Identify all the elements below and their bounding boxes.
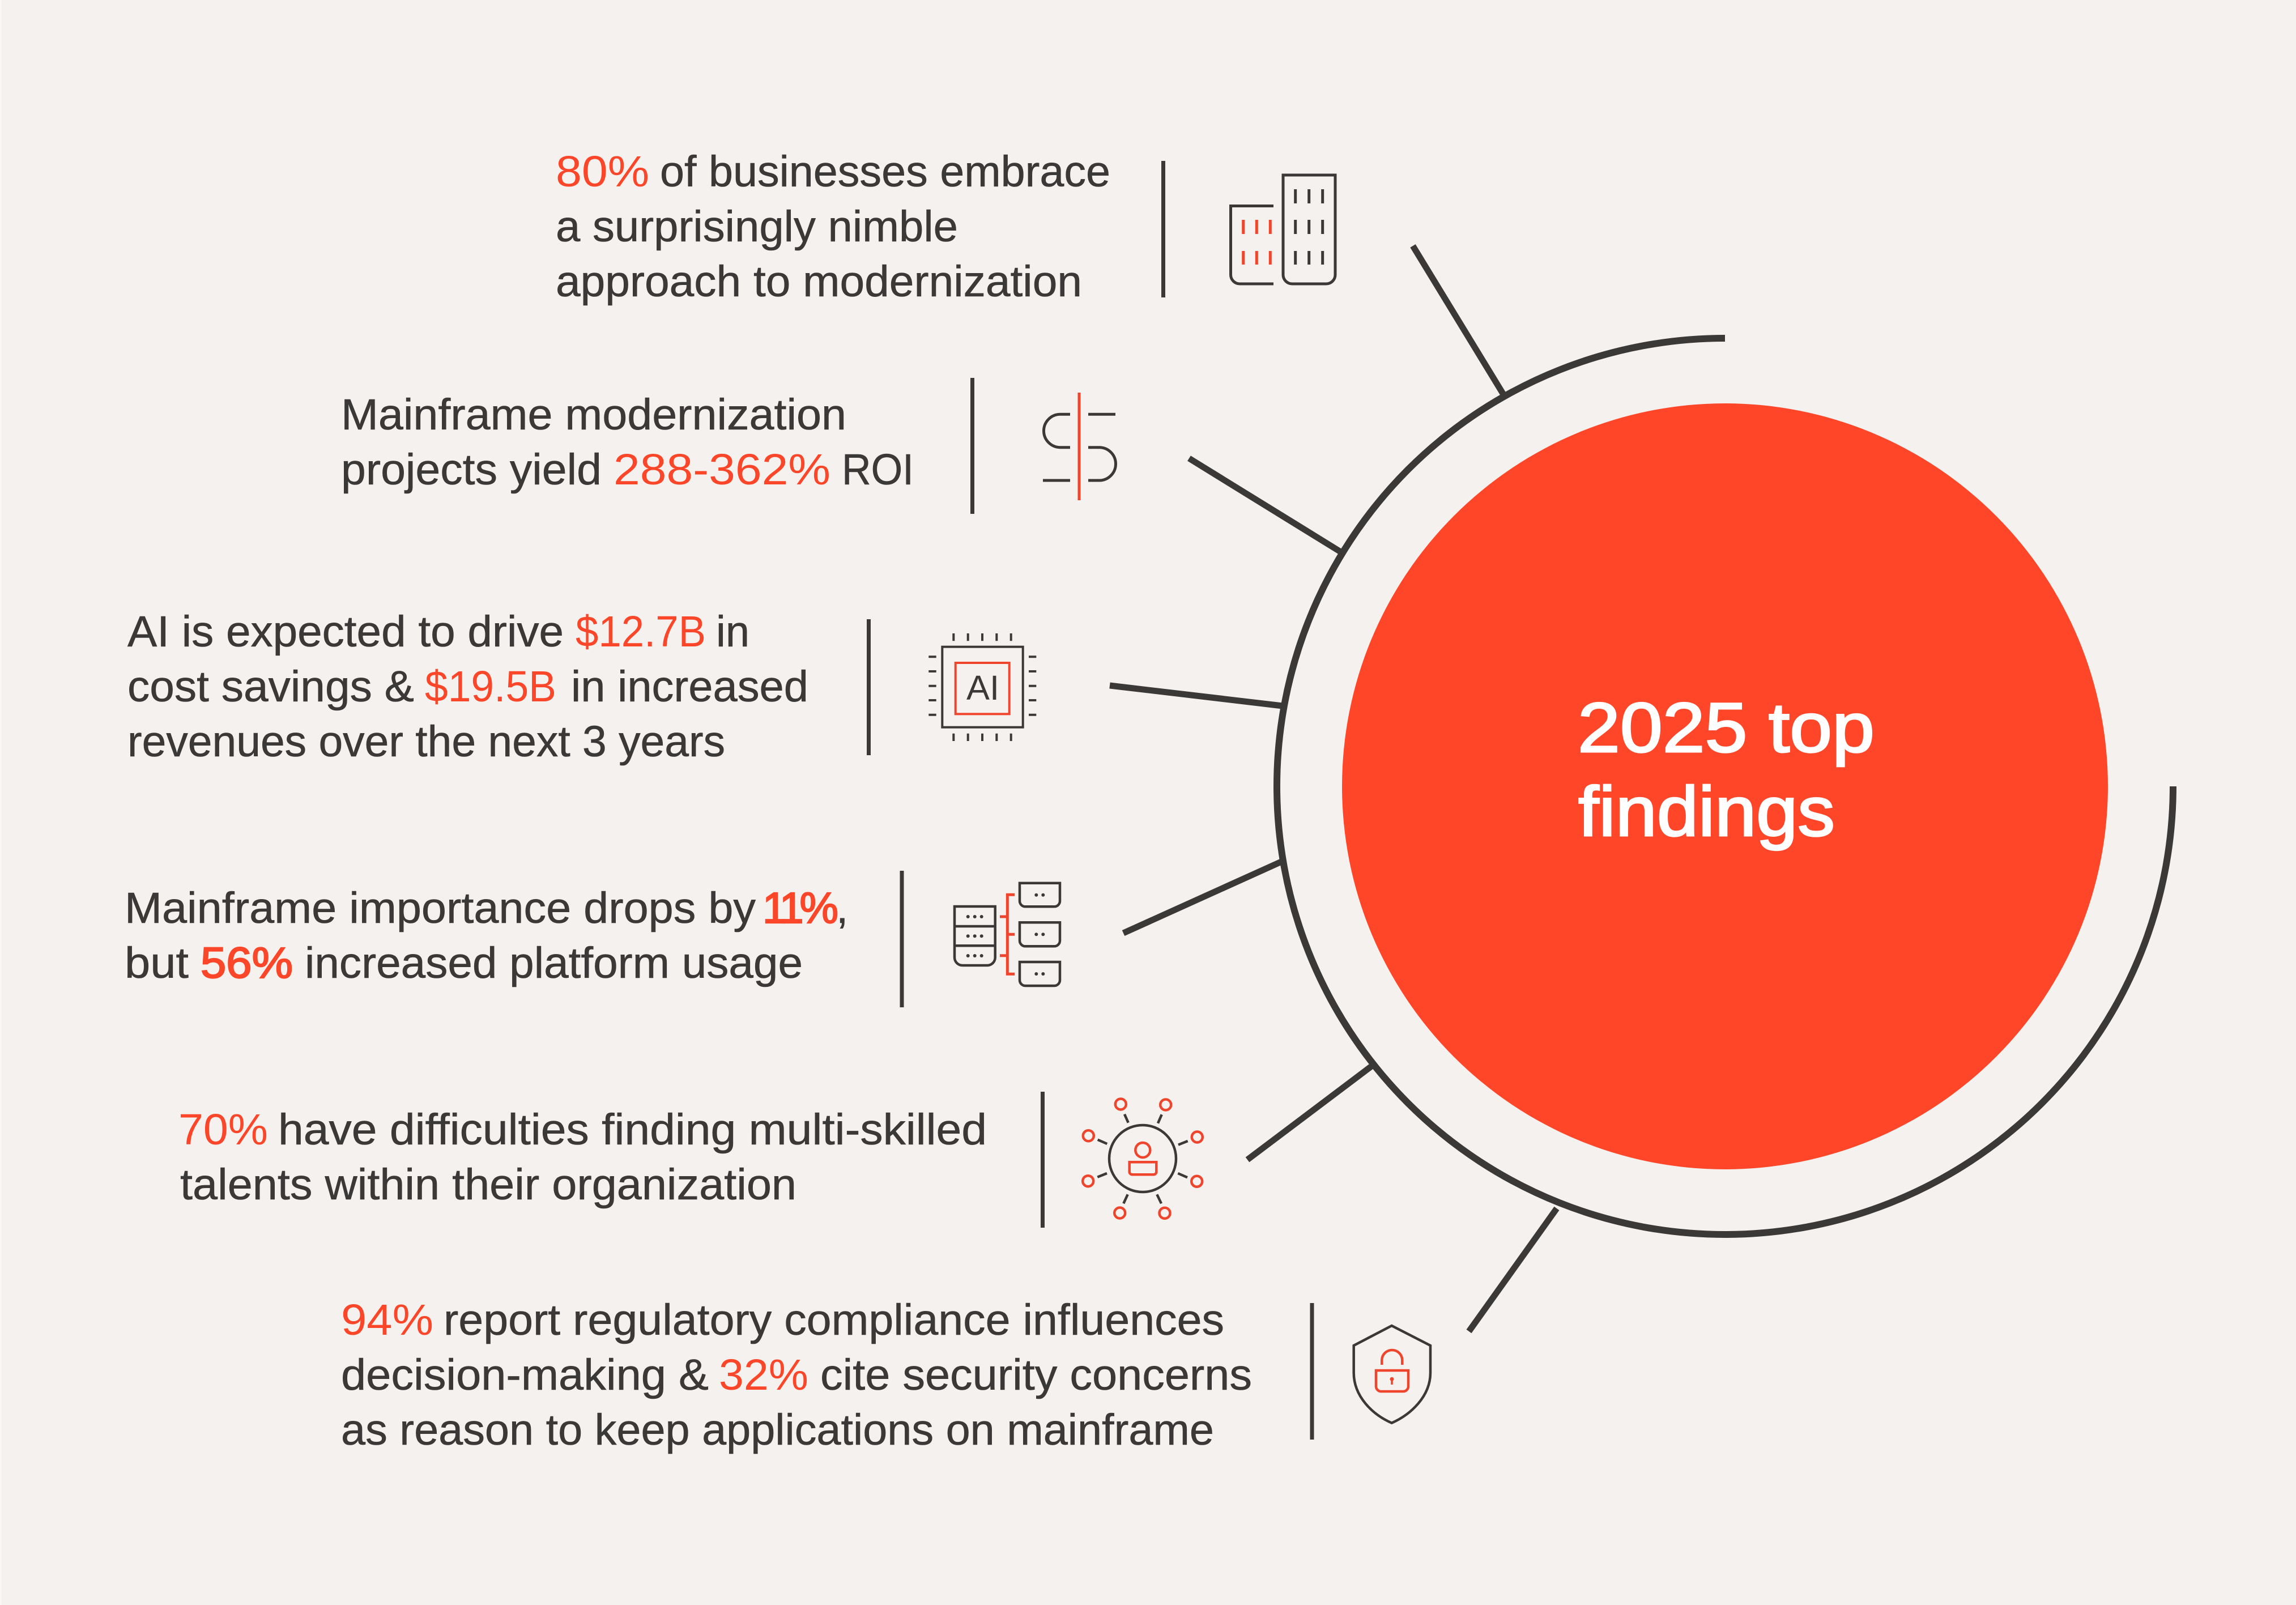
finding 3 text: revenues over the next 3 years [127, 717, 725, 766]
icon: talent network [1083, 1099, 1203, 1219]
connector line 5 [1247, 1065, 1374, 1160]
finding 4 text [125, 884, 848, 987]
finding 2 text: 288-362% [614, 445, 830, 494]
finding 6 divider [1310, 1303, 1314, 1440]
central red circle [1342, 403, 2108, 1169]
icon: AI chip [928, 633, 1036, 741]
finding 6 text [341, 1296, 1252, 1454]
finding 3 text: in [716, 607, 749, 656]
connector line 4 [1123, 861, 1283, 933]
finding 6 text: 94% [341, 1296, 433, 1344]
icon: security shield with lock [1354, 1326, 1430, 1423]
icon: AI chip: AI [966, 669, 999, 707]
finding 6 text: decision-making & [341, 1351, 709, 1399]
finding 1 divider [1161, 161, 1165, 297]
finding 6 text: 32% [719, 1351, 808, 1399]
title: 2025 top [1578, 689, 1875, 767]
finding 4 text: 56% [201, 939, 293, 987]
finding 3 text [127, 607, 808, 766]
finding 5 text [178, 1105, 987, 1209]
finding 5 text: talents within their organization [180, 1160, 796, 1209]
finding 3 divider [867, 619, 871, 755]
finding 4 divider [900, 871, 904, 1007]
finding 1 text: a surprisingly nimble [556, 202, 958, 251]
outer ring arc [1277, 338, 2173, 1234]
finding 4 text: but [125, 939, 189, 987]
finding 1 text: approach to modernization [556, 257, 1082, 306]
finding 4 text: 11% [763, 884, 838, 933]
finding 2 divider [970, 378, 974, 514]
finding 5 divider [1041, 1092, 1045, 1228]
icon: dollar sign [1043, 393, 1115, 500]
connector line 6 [1469, 1208, 1557, 1331]
finding 3 text: cost savings & [127, 662, 414, 711]
finding 5 text: 70% [178, 1105, 268, 1154]
finding 4 text: , [836, 884, 848, 933]
finding 6 text: report regulatory compliance influences [444, 1296, 1224, 1344]
finding 1 text: of businesses embrace [660, 147, 1110, 196]
finding 1 text: 80% [556, 147, 649, 196]
title: findings [1578, 773, 1835, 851]
icon: server to containers [955, 883, 1060, 986]
finding 6 text: cite security concerns [820, 1351, 1252, 1399]
finding 2 text [341, 390, 914, 494]
finding 4 text: Mainframe importance drops by [125, 884, 756, 933]
finding 4 text: increased platform usage [305, 939, 803, 987]
finding 2 text: projects yield [341, 445, 602, 494]
finding 2 text: Mainframe modernization [341, 390, 846, 439]
finding 3 text: $12.7B [576, 607, 706, 656]
connector line 3 [1110, 686, 1283, 706]
icon: office buildings [1230, 175, 1335, 284]
connector line 1 [1413, 246, 1504, 395]
finding 2 text: ROI [842, 445, 914, 494]
finding 5 text: have difficulties finding multi-skilled [278, 1105, 987, 1154]
finding 6 text: as reason to keep applications on mainframe [341, 1406, 1214, 1454]
finding 3 text: in increased [571, 662, 808, 711]
finding 3 text: AI is expected to drive [127, 607, 564, 656]
connector line 2 [1189, 458, 1341, 552]
title [1578, 689, 1875, 851]
finding 1 text [556, 147, 1110, 306]
finding 3 text: $19.5B [425, 662, 556, 711]
